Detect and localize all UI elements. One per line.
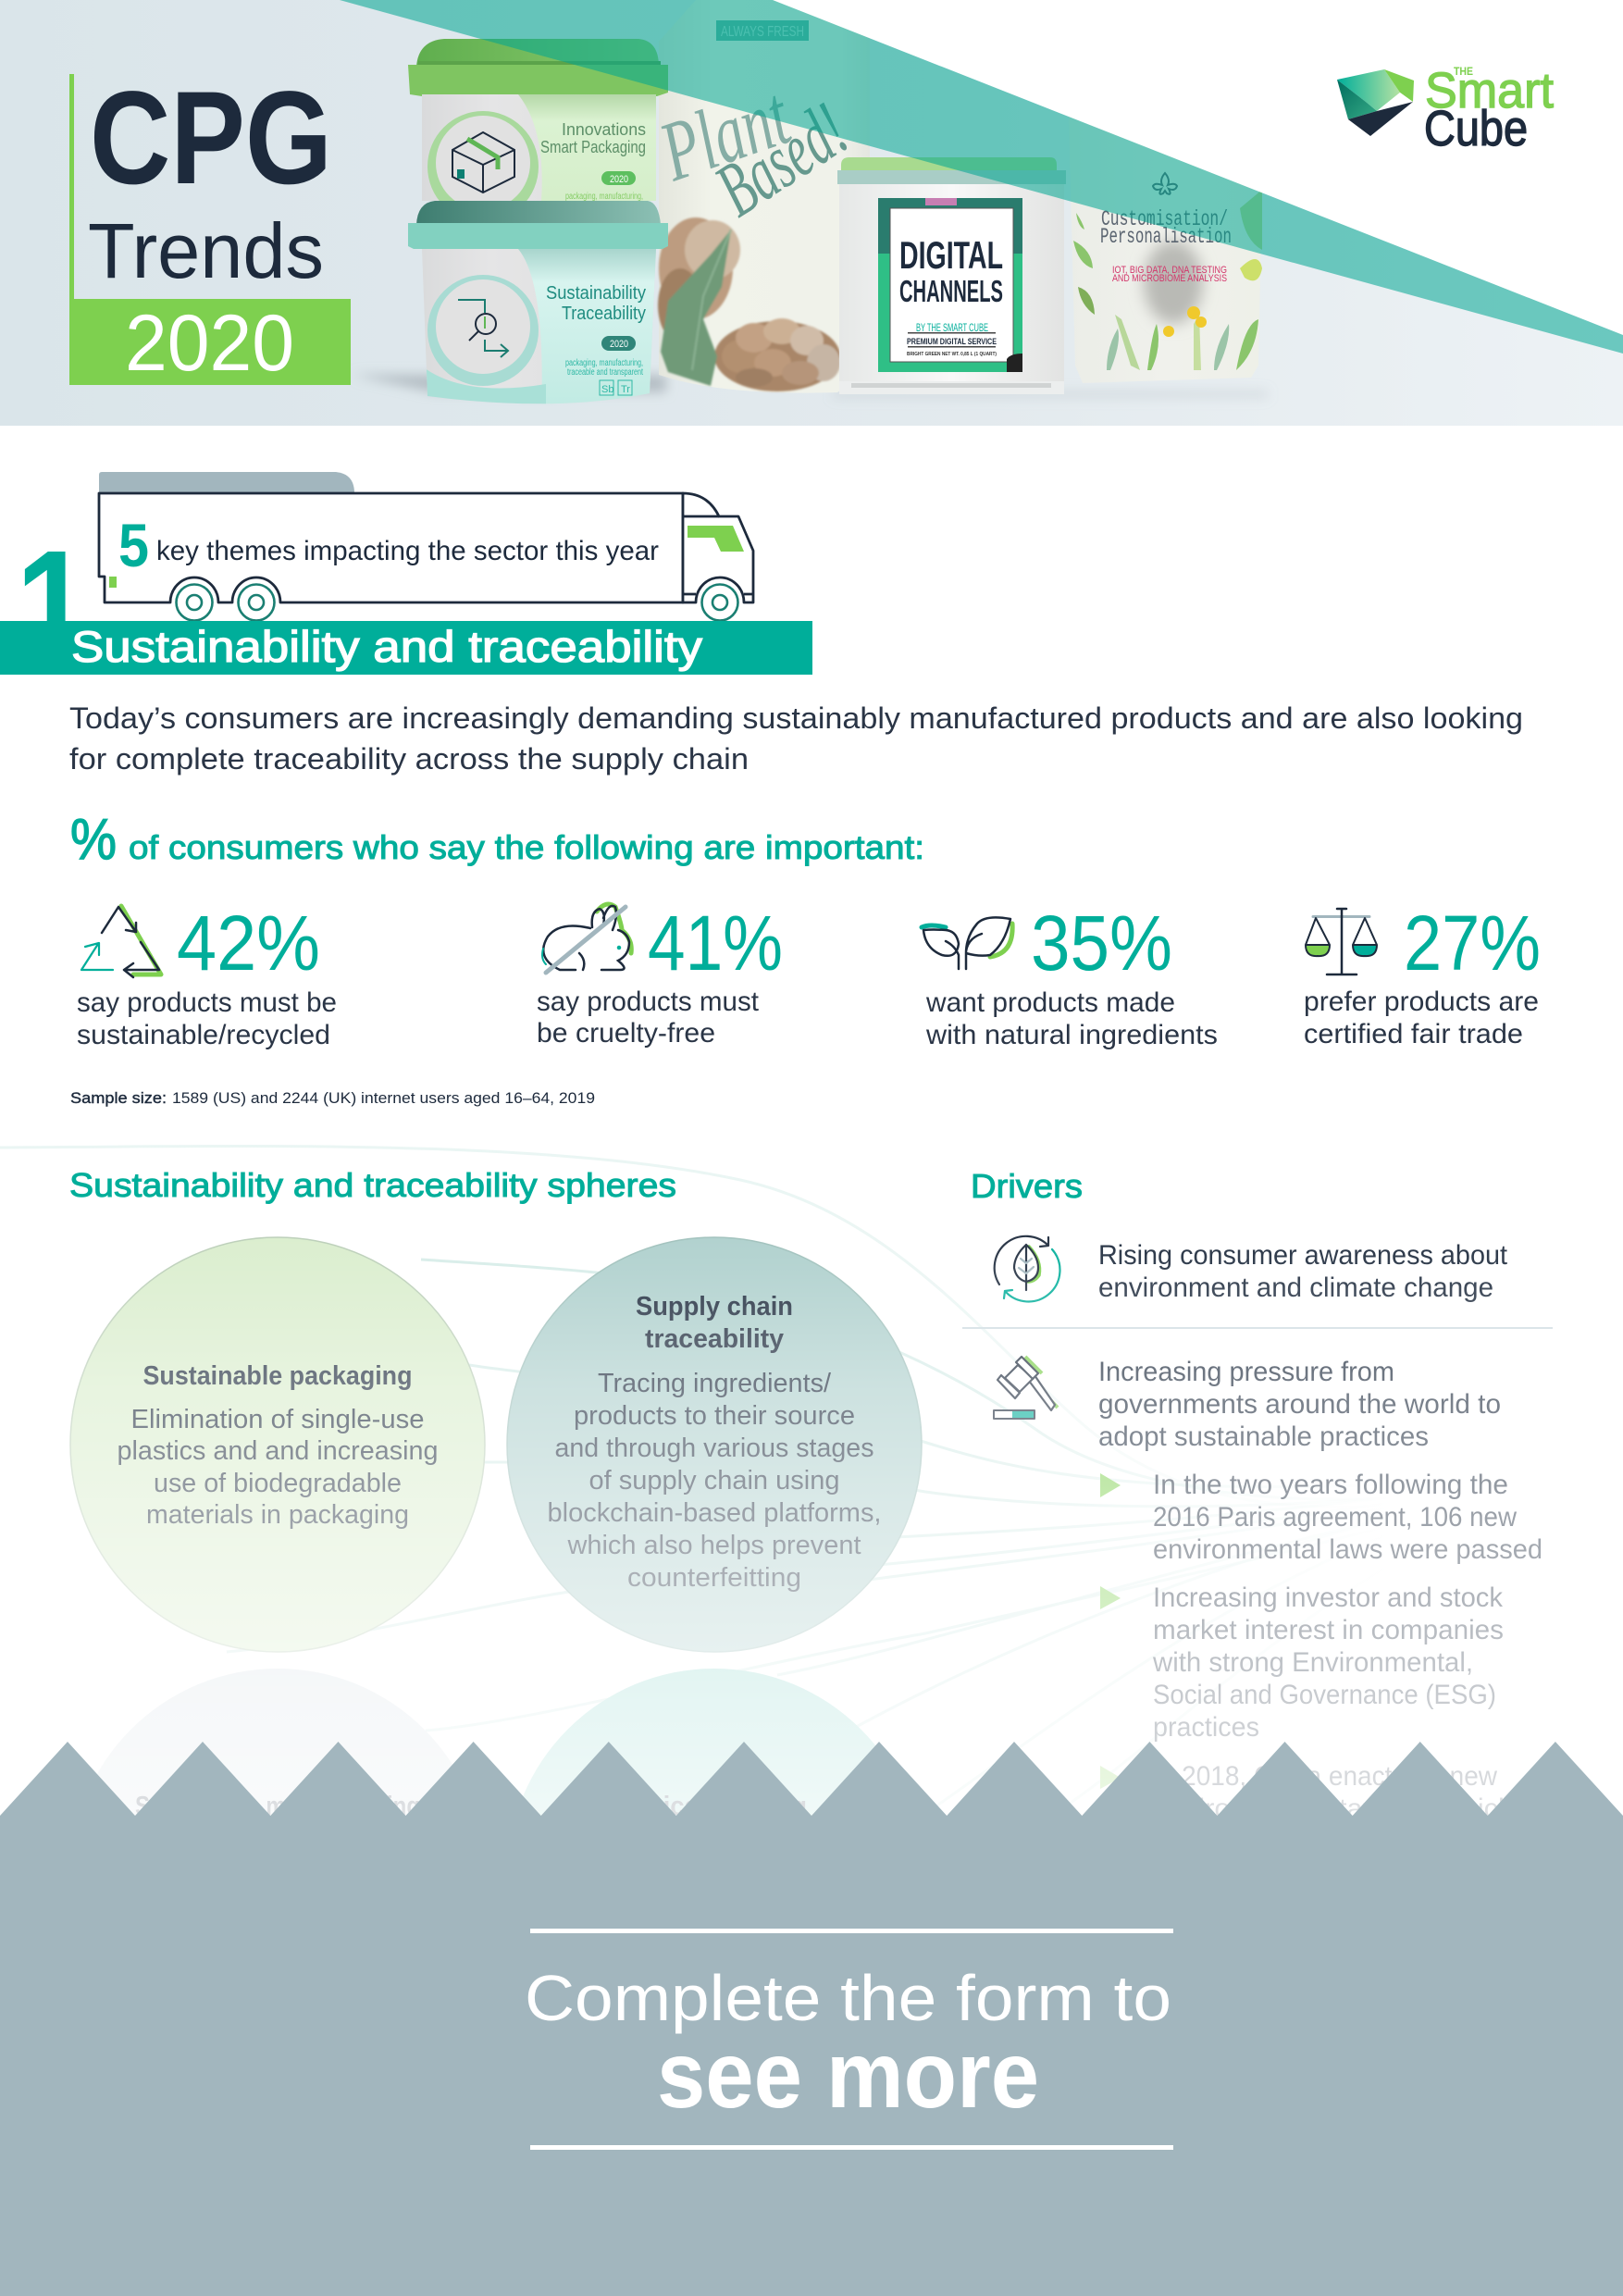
product: sustainability tub: packaging, manufacturing, bbox=[565, 358, 643, 368]
tin label bbox=[878, 198, 1022, 372]
tin label: DIGITAL bbox=[899, 233, 1003, 277]
stat: 27% fair trade: 27% bbox=[1404, 900, 1541, 987]
icon: scales bbox=[1306, 909, 1377, 974]
stat: 27% fair trade: prefer products are bbox=[1304, 987, 1539, 1017]
stat: 27% fair trade: certified fair trade bbox=[1304, 1019, 1523, 1049]
bullet: China law: In 2018, China enacted a new bbox=[1153, 1761, 1497, 1792]
stat: 27% fair trade bbox=[1304, 900, 1541, 1049]
tub text bbox=[546, 283, 646, 324]
truck wheels bbox=[176, 585, 738, 620]
truck headline: key themes impacting the sector this year bbox=[156, 536, 659, 566]
bag lettering: Based! bbox=[701, 86, 862, 233]
heading: drivers: Drivers bbox=[971, 1167, 1083, 1205]
sphere: sustainable packaging bbox=[70, 1237, 485, 1652]
bullet: investor interest: Social and Governance (ESG) bbox=[1153, 1680, 1496, 1710]
sphere: supply chain traceability: products to their source bbox=[574, 1401, 855, 1431]
stat: 35% natural ingredients: want products made bbox=[925, 987, 1175, 1018]
background curve lines bbox=[0, 1147, 1592, 1814]
cta text: see more bbox=[657, 2022, 1039, 2128]
sphere: sustainable packaging: Sustainable packaging bbox=[142, 1361, 413, 1391]
drivers divider bbox=[962, 1327, 1553, 1329]
stat: 41% cruelty-free: 41% bbox=[648, 900, 783, 987]
stat: 35% natural ingredients bbox=[922, 900, 1218, 1050]
product: innovations tub: 2020 bbox=[610, 174, 628, 185]
icon: gavel bbox=[994, 1357, 1058, 1419]
product: sustainability tub: Sb bbox=[601, 384, 613, 395]
tin label: PREMIUM DIGITAL SERVICE bbox=[907, 337, 997, 346]
stat: 41% cruelty-free: say products must bbox=[537, 987, 760, 1017]
bullet: Paris agreement: 2016 Paris agreement, 106 new bbox=[1153, 1502, 1517, 1533]
truck headline: 5 bbox=[118, 511, 149, 579]
product: innovations tub: packaging, manufacturing, bbox=[565, 192, 643, 202]
always fresh tag: ALWAYS FRESH bbox=[721, 24, 804, 40]
tin label: BY THE SMART CUBE bbox=[916, 321, 988, 334]
stats heading bbox=[70, 808, 924, 872]
product: plant based bag bbox=[649, 0, 870, 393]
sphere: supply chain traceability bbox=[507, 1237, 922, 1652]
sphere: lower left, faded bbox=[70, 1669, 485, 2083]
bullet: investor interest: with strong Environmental, bbox=[1152, 1647, 1473, 1678]
stat: 41% cruelty-free bbox=[537, 900, 783, 1049]
sphere: lower left, faded: Sustainable manufacturing bbox=[135, 1792, 420, 1821]
cta text: Complete the form to bbox=[525, 1962, 1171, 2034]
bullet: China law bbox=[1100, 1761, 1514, 1824]
product: innovations tub bbox=[408, 39, 668, 222]
plant based rocks and leaf bbox=[658, 217, 840, 391]
flower logo bbox=[1153, 173, 1177, 194]
stat: 42% recycled bbox=[77, 900, 337, 1050]
sphere: supply chain traceability: and through various stages bbox=[555, 1433, 873, 1463]
driver: government pressure: governments around the world to bbox=[1098, 1389, 1501, 1420]
sphere: lower right, faded bbox=[507, 1669, 922, 2083]
logo: The Smart Cube: Cube bbox=[1424, 101, 1528, 156]
sphere: supply chain traceability: of supply chain using bbox=[588, 1466, 840, 1496]
tub text bbox=[540, 120, 646, 156]
call to action panel with zigzag edge bbox=[0, 1742, 1623, 2296]
logo: The Smart Cube: THE bbox=[1454, 65, 1473, 78]
sphere: supply chain traceability: Supply chain bbox=[636, 1292, 793, 1322]
tub text: Innovations bbox=[562, 120, 646, 139]
driver: consumer awareness: environment and climate change bbox=[1098, 1272, 1493, 1303]
bullet: Paris agreement: environmental laws were passed bbox=[1153, 1534, 1542, 1565]
sphere: sustainable packaging: use of biodegradable bbox=[154, 1469, 402, 1498]
bag lettering: Plant bbox=[649, 68, 802, 199]
stats heading: of consumers who say the following are important: bbox=[129, 828, 924, 866]
stat: 42% recycled: 42% bbox=[177, 900, 320, 987]
bullet: Paris agreement bbox=[1100, 1470, 1542, 1565]
bullet: investor interest: market interest in companies bbox=[1153, 1615, 1504, 1645]
sphere: supply chain traceability: traceability bbox=[645, 1324, 784, 1354]
sphere: supply chain traceability: blockchain-based platforms, bbox=[548, 1498, 881, 1528]
product: customisation pouch bbox=[1069, 116, 1262, 383]
stat: 35% natural ingredients: 35% bbox=[1031, 900, 1172, 987]
sphere: sustainable packaging: plastics and and increasing bbox=[117, 1436, 439, 1466]
sphere: lower right, faded: Ethical farming bbox=[622, 1792, 807, 1821]
icon: magnifier path bbox=[458, 300, 508, 357]
intro paragraph bbox=[69, 701, 1523, 776]
title: Trends: Trends bbox=[88, 207, 324, 294]
tub text: Sustainability bbox=[546, 283, 646, 304]
product: customisation pouch: IOT, BIG DATA, DNA TESTING bbox=[1112, 265, 1227, 276]
intro paragraph: for complete traceability across the supply chain bbox=[69, 742, 749, 776]
stat: 42% recycled: sustainable/recycled bbox=[77, 1020, 330, 1050]
sphere: supply chain traceability: which also helps prevent bbox=[567, 1531, 861, 1560]
tin label: BRIGHT GREEN NET WT. 0,85 L (1 QUART) bbox=[907, 352, 997, 357]
tub text: Traceability bbox=[562, 304, 646, 324]
product: customisation pouch: AND MICROBIOME ANALYSIS bbox=[1112, 273, 1227, 284]
cta text bbox=[525, 1962, 1171, 2128]
icon: recycle triangle bbox=[81, 906, 161, 977]
sphere: supply chain traceability: counterfeitting bbox=[627, 1563, 801, 1593]
title block bbox=[69, 65, 351, 388]
fade overlay bbox=[0, 1148, 1623, 1832]
icon: leaves bbox=[922, 917, 1012, 969]
product: customisation pouch: Personalisation bbox=[1100, 225, 1232, 249]
sphere: sustainable packaging: materials in packaging bbox=[146, 1500, 409, 1530]
icon: leaf with cycle arrows bbox=[995, 1236, 1059, 1301]
bullet: investor interest: practices bbox=[1153, 1712, 1259, 1743]
stat: 35% natural ingredients: with natural ingredients bbox=[925, 1020, 1218, 1050]
bullet: China law: environmental tax law, which bbox=[1153, 1793, 1514, 1824]
always fresh tag bbox=[716, 20, 809, 41]
intro paragraph: Today’s consumers are increasingly demanding sustainably manufactured products and are also looking bbox=[69, 701, 1523, 735]
sphere: supply chain traceability: Tracing ingredients/ bbox=[598, 1369, 832, 1398]
driver: government pressure: Increasing pressure from bbox=[1098, 1357, 1394, 1387]
driver: consumer awareness: Rising consumer awareness about bbox=[1098, 1240, 1508, 1271]
sample size note: 1589 (US) and 2244 (UK) internet users aged 16–64, 2019 bbox=[172, 1089, 595, 1107]
product: sustainability tub bbox=[408, 201, 668, 416]
section number: 1 bbox=[16, 518, 90, 694]
truck headline bbox=[118, 511, 659, 579]
stat: 42% recycled: say products must be bbox=[77, 987, 337, 1018]
driver: government pressure bbox=[994, 1357, 1501, 1452]
title: 2020 box: 2020 bbox=[125, 299, 294, 388]
title: 2020 box bbox=[69, 299, 351, 388]
logo: The Smart Cube bbox=[1337, 63, 1554, 156]
product: digital channels tin bbox=[837, 157, 1066, 394]
product: customisation pouch: Customisation/ bbox=[1101, 207, 1228, 231]
bullet: investor interest bbox=[1100, 1582, 1504, 1743]
icon: box bbox=[452, 132, 514, 192]
logo: The Smart Cube: Smart bbox=[1425, 63, 1554, 118]
floor shadows bbox=[352, 375, 1268, 398]
section heading bar: Sustainability and traceability bbox=[71, 622, 703, 671]
bag lettering bbox=[649, 68, 862, 233]
product: sustainability tub: Tr bbox=[621, 384, 630, 395]
sample size note: Sample size: bbox=[70, 1089, 167, 1107]
tub text: Smart Packaging bbox=[540, 138, 646, 156]
driver: consumer awareness bbox=[995, 1236, 1508, 1303]
stat: 41% cruelty-free: be cruelty-free bbox=[537, 1018, 715, 1049]
title: CPG: CPG bbox=[90, 65, 332, 212]
driver: government pressure: adopt sustainable practices bbox=[1098, 1421, 1429, 1452]
bullet: Paris agreement: In the two years following the bbox=[1153, 1470, 1508, 1500]
header banner with product photo bbox=[0, 0, 1623, 426]
section heading bar bbox=[0, 621, 812, 675]
heading: spheres: Sustainability and traceability spheres bbox=[69, 1166, 676, 1204]
stats heading: % bbox=[70, 808, 117, 872]
truck illustration bbox=[99, 472, 753, 620]
product: sustainability tub: traceable and transparent bbox=[567, 367, 643, 378]
bullet: investor interest: Increasing investor and stock bbox=[1153, 1582, 1504, 1613]
white corner above the band bbox=[773, 0, 1623, 335]
product: sustainability tub: 2020 bbox=[610, 339, 628, 350]
tin label: CHANNELS bbox=[899, 274, 1003, 308]
icon: crossed rabbit bbox=[542, 904, 631, 973]
diagonal teal band bbox=[340, 0, 1623, 354]
sphere: sustainable packaging: Elimination of single-use bbox=[131, 1405, 424, 1434]
